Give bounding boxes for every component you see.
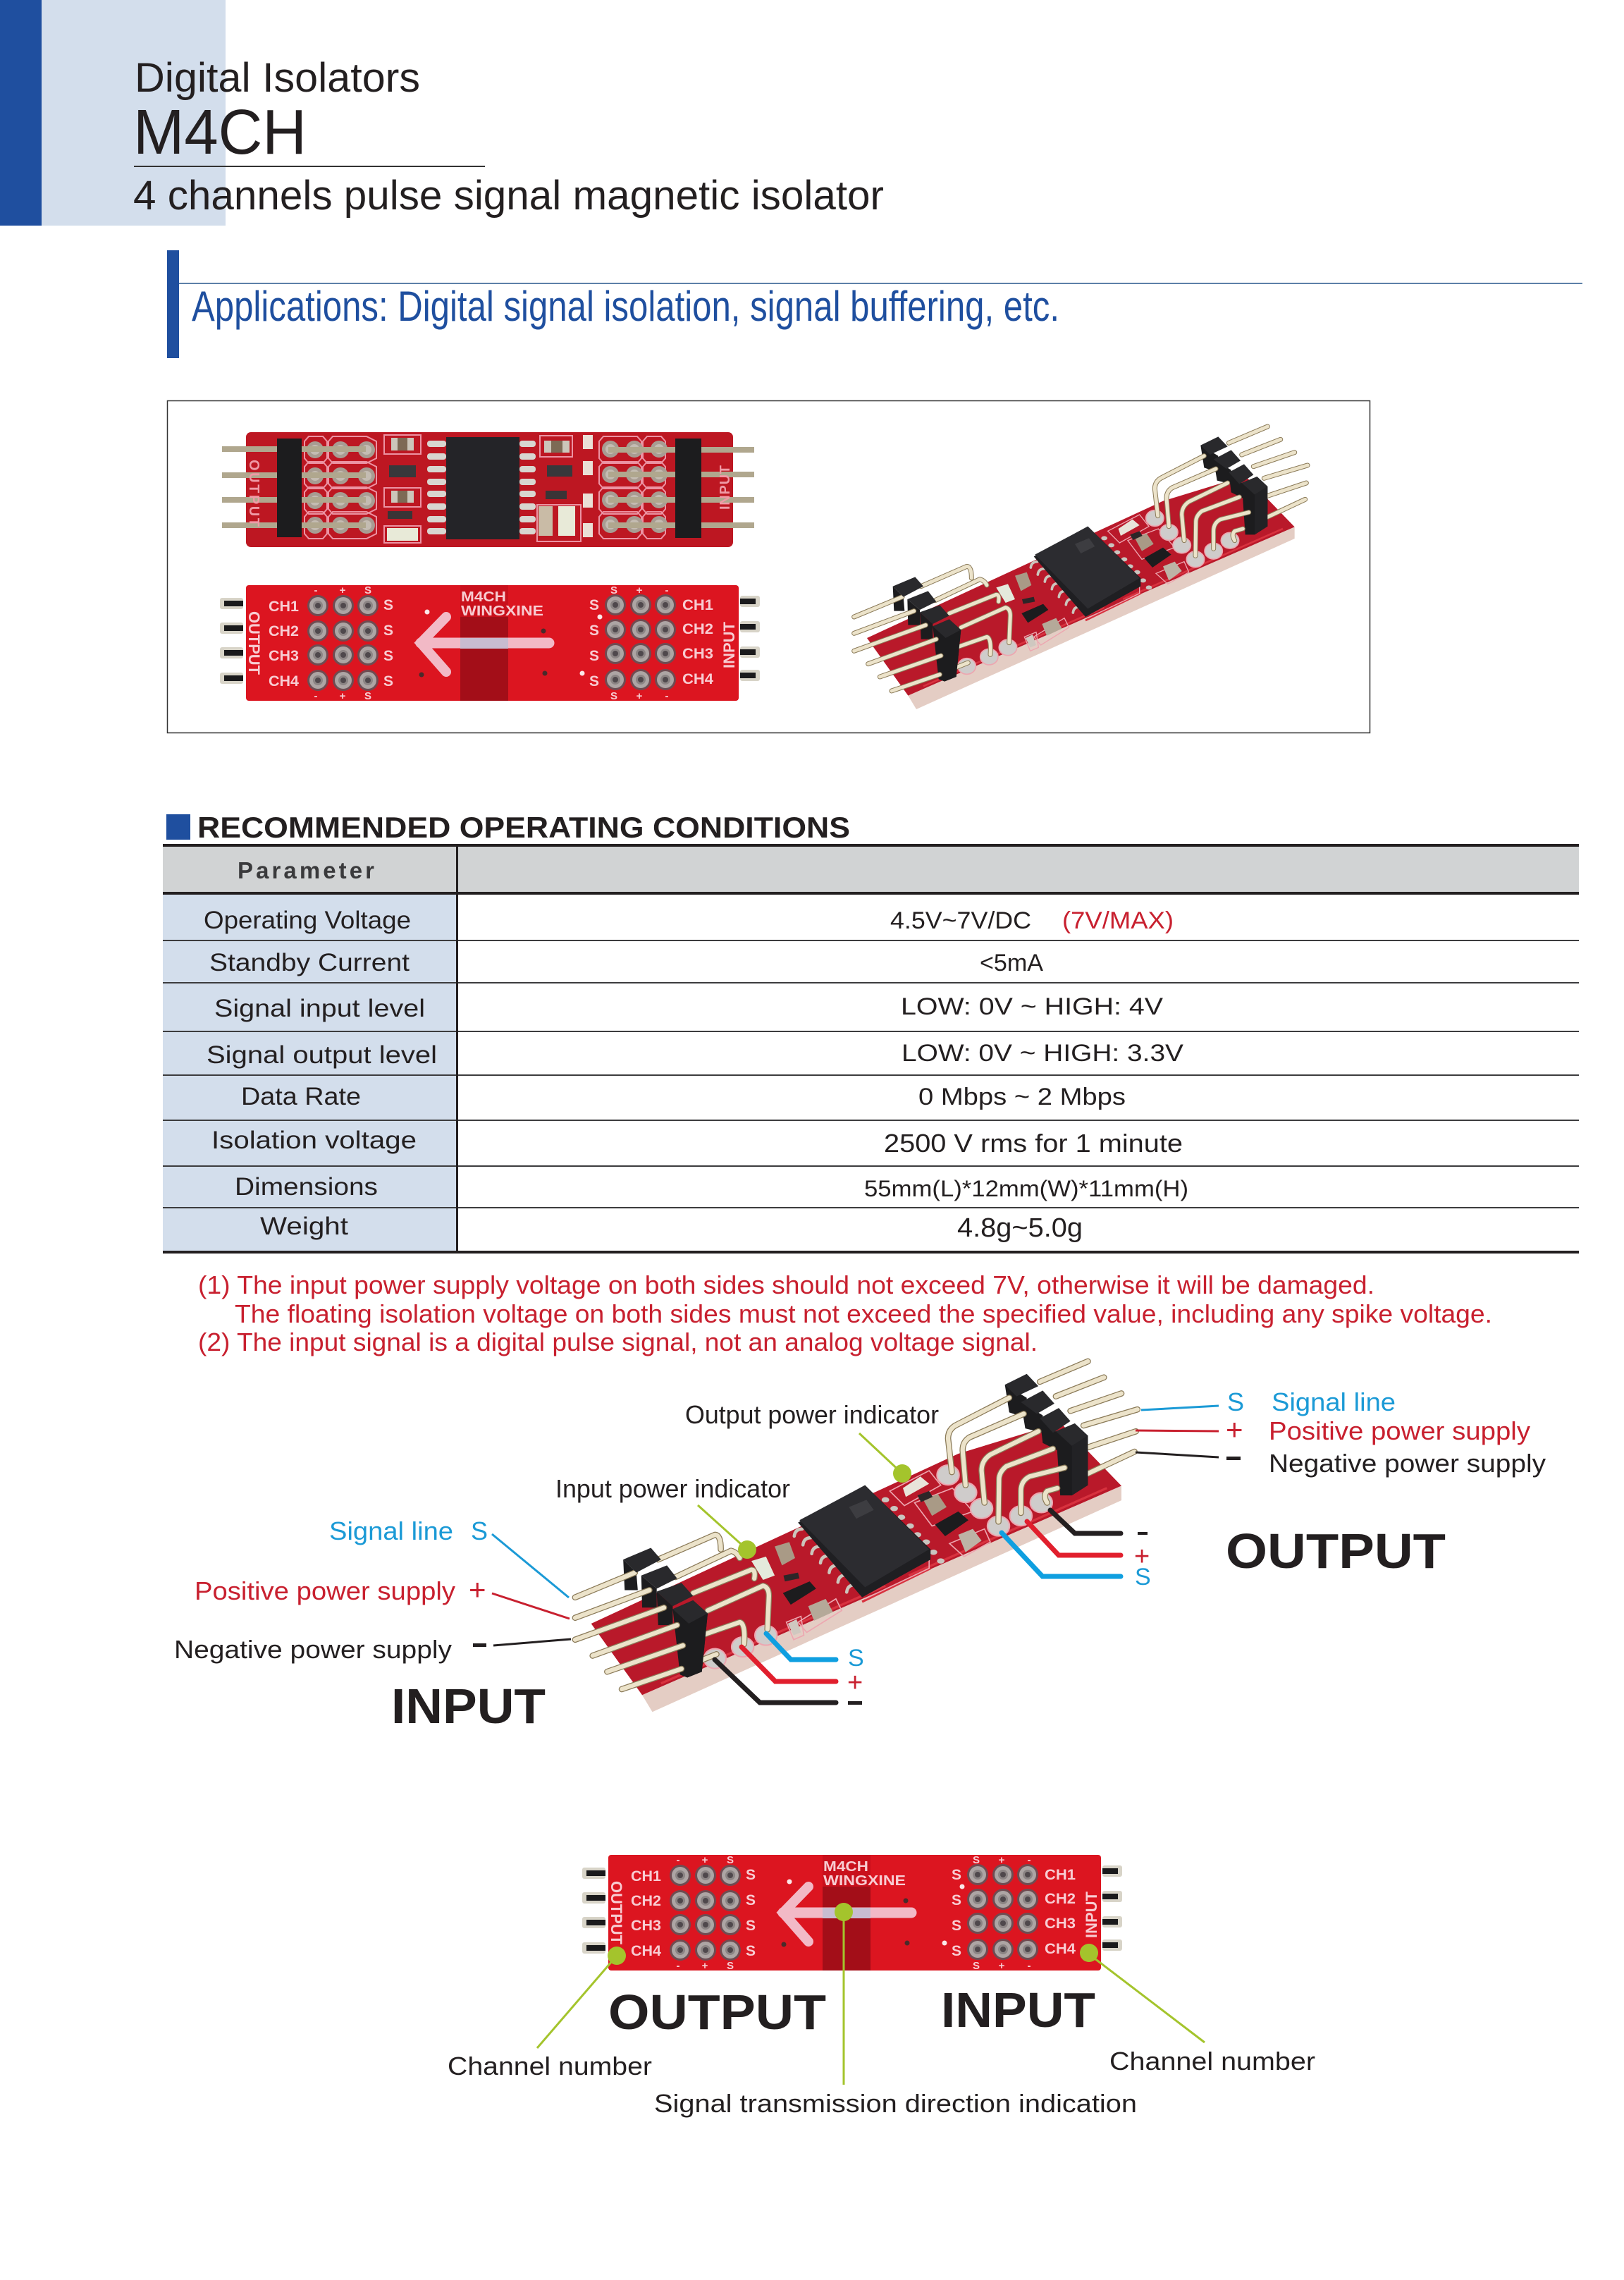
photo: board back view repeat: S xyxy=(952,1892,961,1908)
photo: board back view: CH1 xyxy=(269,599,299,615)
photo: board back view xyxy=(220,584,760,702)
photo: board back view repeat: S xyxy=(973,1960,980,1972)
photo: board back view: INPUT xyxy=(720,621,738,668)
row: signal input level: LOW: 0V ~ HIGH: 4V xyxy=(901,993,1163,1020)
photo: board back view repeat: CH3 xyxy=(1045,1916,1076,1932)
photo: board back view repeat: - xyxy=(677,1854,679,1866)
applications banner xyxy=(167,250,1582,358)
header colour block xyxy=(0,0,226,226)
input labels: Negative power supply xyxy=(174,1635,452,1664)
photo: board back view: S xyxy=(383,648,393,664)
row: weight xyxy=(260,1213,1083,1243)
label: output: OUTPUT xyxy=(608,1985,826,2040)
row: weight: 4.8g~5.0g xyxy=(957,1213,1083,1243)
row: data rate: Data Rate xyxy=(241,1083,361,1110)
photo: board back view repeat: CH1 xyxy=(1045,1867,1076,1883)
photo: board back view repeat: S xyxy=(952,1867,961,1883)
row: signal input level xyxy=(214,993,1163,1022)
label: output: OUTPUT xyxy=(1226,1524,1446,1579)
diagram: back of board callouts xyxy=(448,1854,1315,2118)
wires: input side xyxy=(715,1634,836,1703)
photo: board back view repeat: + xyxy=(999,1854,1005,1866)
row: weight: Weight xyxy=(260,1213,348,1240)
callout: signal direction: Signal transmission direction indication xyxy=(654,2089,1137,2118)
photo: board back view repeat: CH3 xyxy=(631,1918,661,1934)
photo: board back view: OUTPUT xyxy=(245,611,263,675)
photo: board back view repeat: - xyxy=(1028,1960,1031,1972)
input labels xyxy=(174,1516,488,1664)
photo: board back view: + xyxy=(340,584,346,596)
wire end labels: input side: S xyxy=(848,1645,864,1672)
photo: board back view repeat: + xyxy=(702,1960,708,1972)
photo: board back view: S xyxy=(383,623,393,639)
subtitle: 4 channels pulse signal magnetic isolator xyxy=(133,173,884,219)
row: standby current: Standby Current xyxy=(209,949,410,976)
row: signal output level xyxy=(207,1040,1183,1069)
input labels: Positive power supply xyxy=(195,1576,455,1605)
callout: signal direction xyxy=(654,1903,1137,2118)
photo: board back view: CH3 xyxy=(682,646,713,662)
row: data rate xyxy=(241,1083,1126,1110)
applications banner: Applications: Digital signal isolation, signal buffering, etc. xyxy=(192,283,1059,330)
input labels: S xyxy=(471,1516,488,1545)
photo: board back view repeat: S xyxy=(746,1892,756,1908)
output labels xyxy=(1226,1387,1546,1478)
callout: right channel number xyxy=(1080,1944,1315,2076)
table: operating parameters xyxy=(163,844,1579,1254)
row: dimensions: 55mm(L)*12mm(W)*11mm(H) xyxy=(864,1176,1188,1201)
label: input: INPUT xyxy=(941,1982,1095,2037)
photo: board back view: CH2 xyxy=(269,623,299,639)
row: operating voltage xyxy=(204,907,1174,934)
photo: board back view: CH4 xyxy=(269,673,299,689)
notes: warnings: (1) The input power supply voltage on both sides should not exceed 7V, otherwise it will be damaged. xyxy=(198,1270,1374,1299)
photo: board back view: M4CH xyxy=(461,589,506,605)
photo: board back view repeat: CH4 xyxy=(1045,1941,1076,1957)
photo: board front view: INPUT xyxy=(718,465,733,510)
notes: warnings: (2) The input signal is a digital pulse signal, not an analog voltage signal. xyxy=(198,1328,1038,1356)
photo: board back view: CH2 xyxy=(682,621,713,637)
photo: board front view: OUTPUT xyxy=(246,460,262,527)
row: operating voltage: Operating Voltage xyxy=(204,907,411,934)
row: data rate: 0 Mbps ~ 2 Mbps xyxy=(918,1084,1126,1110)
photo: board back view: S xyxy=(589,623,599,639)
photo: board back view: S xyxy=(364,690,371,702)
photo: board back view: + xyxy=(636,584,643,596)
photo: board back view: S xyxy=(610,584,617,596)
photo: board back view repeat: WINGXINE xyxy=(823,1873,906,1889)
table header: parameter: Parameter xyxy=(238,857,374,883)
photo: board back view repeat: M4CH xyxy=(823,1859,868,1875)
row: standby current: <5mA xyxy=(980,950,1043,976)
photo: board back view repeat: S xyxy=(973,1854,980,1866)
callout: right channel number: Channel number xyxy=(1109,2047,1315,2076)
output labels: Negative power supply xyxy=(1269,1449,1546,1478)
photo: board angled view xyxy=(854,427,1308,709)
row: signal output level: Signal output level xyxy=(207,1041,437,1069)
row: dimensions xyxy=(235,1173,1188,1201)
photo: board back view: CH1 xyxy=(682,597,713,613)
photo: board back view: WINGXINE xyxy=(461,603,543,619)
output labels: + xyxy=(1226,1413,1243,1446)
row: signal input level: Signal input level xyxy=(214,995,425,1022)
photo: board back view repeat: S xyxy=(746,1918,756,1934)
photo: board back view repeat: S xyxy=(746,1867,756,1883)
title: model name: M4CH xyxy=(133,97,307,168)
photo: board back view: S xyxy=(610,690,617,702)
callout: output power indicator: Output power indicator xyxy=(685,1400,939,1429)
label: input: INPUT xyxy=(391,1679,546,1734)
photo: board back view: S xyxy=(589,597,599,613)
photo: board back view repeat: + xyxy=(999,1960,1005,1972)
photo: board back view repeat: S xyxy=(727,1960,734,1972)
photo: board back view: S xyxy=(364,584,371,596)
callout: left channel number xyxy=(448,1947,652,2080)
output labels: Signal line xyxy=(1272,1387,1396,1416)
row: operating voltage: (7V/MAX) xyxy=(1062,907,1174,934)
output labels: S xyxy=(1227,1387,1244,1416)
photo: board back view repeat: S xyxy=(952,1943,961,1959)
photo: board back view repeat: S xyxy=(727,1854,734,1866)
callout: left channel number: Channel number xyxy=(448,2052,652,2080)
photo: board back view repeat: CH2 xyxy=(1045,1891,1076,1907)
notes: warnings: The floating isolation voltage on both sides must not exceed the specified value, including any spike voltage. xyxy=(235,1299,1492,1328)
photo: board back view: CH3 xyxy=(269,648,299,664)
wire end labels: output side: + xyxy=(1134,1542,1150,1571)
photo: board back view repeat: S xyxy=(746,1943,756,1959)
photo: board back view repeat: S xyxy=(952,1918,961,1934)
wires: output side xyxy=(1002,1510,1121,1576)
row: operating voltage: 4.5V~7V/DC xyxy=(890,907,1031,934)
photo: board back view repeat: - xyxy=(677,1960,679,1972)
photo: board back view repeat: CH4 xyxy=(631,1943,661,1959)
photo: board back view repeat: INPUT xyxy=(1083,1891,1100,1938)
row: standby current xyxy=(209,949,1043,976)
photo: board back view: S xyxy=(383,597,393,613)
leader lines: input pins xyxy=(492,1534,571,1645)
callout: input power indicator: Input power indicator xyxy=(555,1474,790,1503)
photo: board back view repeat: OUTPUT xyxy=(608,1881,625,1945)
photo: board back view: - xyxy=(314,584,317,596)
photo: board back view repeat: + xyxy=(702,1854,708,1866)
notes: warnings xyxy=(198,1270,1492,1356)
wire end labels: output side: S xyxy=(1135,1564,1151,1591)
input labels: + xyxy=(469,1573,486,1606)
photo: board back view: S xyxy=(383,673,393,689)
callout: output power indicator xyxy=(685,1400,939,1483)
photo: board back view repeat: CH1 xyxy=(631,1868,661,1884)
section heading: recommended operating conditions: RECOMMENDED OPERATING CONDITIONS xyxy=(197,811,850,844)
photo: large angled board xyxy=(575,1361,1138,1712)
photo: board back view: - xyxy=(314,690,317,702)
title: product category: Digital Isolators xyxy=(135,55,420,101)
wire end labels: input side: + xyxy=(847,1668,863,1698)
panel: product photos xyxy=(168,400,1370,733)
photo: board back view: CH4 xyxy=(682,671,713,687)
photo: board back view: + xyxy=(340,690,346,702)
callout: input power indicator xyxy=(555,1474,790,1559)
output labels: Positive power supply xyxy=(1269,1416,1530,1445)
photo: board front view xyxy=(222,432,754,547)
diagram: pinout of angled board xyxy=(174,1361,1546,1734)
photo: board back view: S xyxy=(589,648,599,664)
input labels: Signal line xyxy=(329,1516,453,1545)
wire end labels: input side xyxy=(847,1645,864,1705)
photo: board back view: - xyxy=(665,584,668,596)
row: signal output level: LOW: 0V ~ HIGH: 3.3V xyxy=(902,1040,1183,1067)
row: isolation voltage xyxy=(211,1127,1183,1158)
photo: board back view repeat xyxy=(582,1854,1122,1972)
row: isolation voltage: Isolation voltage xyxy=(211,1127,417,1154)
wire end labels: output side xyxy=(1134,1532,1151,1591)
row: isolation voltage: 2500 V rms for 1 minute xyxy=(884,1129,1183,1158)
photo: board back view: - xyxy=(665,690,668,702)
photo: board back view: + xyxy=(636,690,643,702)
photo: board back view repeat: CH2 xyxy=(631,1893,661,1909)
photo: board back view repeat: - xyxy=(1028,1854,1031,1866)
photo: board back view: S xyxy=(589,673,599,689)
leader lines: output pins xyxy=(1136,1406,1219,1457)
row: dimensions: Dimensions xyxy=(235,1173,378,1201)
